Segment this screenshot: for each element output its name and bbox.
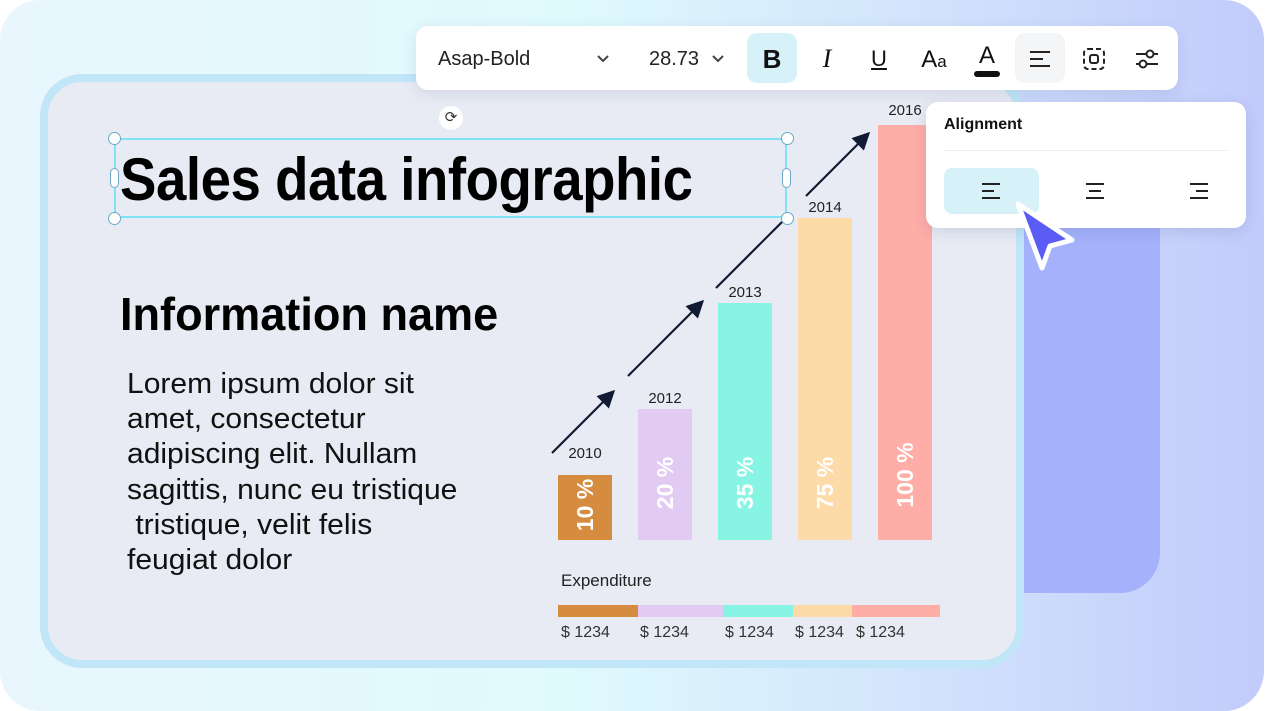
title selection box [114, 138, 787, 218]
align left option [944, 168, 1039, 214]
align button [1015, 33, 1065, 83]
underline: U [871, 46, 887, 71]
bar 2016 [878, 125, 932, 540]
align center option [1086, 183, 1104, 199]
bar chart: 2013 [728, 284, 762, 301]
bold button [747, 33, 797, 83]
body text: sagittis, nunc eu tristique [127, 474, 457, 506]
icon: settings sliders [1136, 50, 1158, 68]
expenditure bar [558, 605, 940, 617]
year labels: 2010 [568, 445, 602, 462]
toolbar [416, 26, 1178, 90]
bold button: B [763, 44, 781, 74]
bar chart: 2016 [888, 102, 922, 119]
case: Aa [921, 46, 947, 73]
selection handles [108, 132, 121, 145]
text color: A [979, 42, 995, 69]
align right option [1190, 183, 1208, 199]
bar chart: 2012 [648, 390, 682, 407]
italic: I [823, 44, 831, 73]
bar 2010: 10 % [572, 479, 598, 531]
body text: Lorem ipsum dolor sit [127, 368, 414, 400]
bar 2016: 100 % [892, 442, 918, 508]
expenditure label: Expenditure [561, 571, 652, 590]
text: $ 1234 [725, 624, 774, 641]
purple back shape [990, 200, 1160, 593]
icon: cursor [1016, 202, 1074, 270]
bar 2013: 35 % [732, 457, 758, 509]
body text [127, 368, 457, 576]
bar chart: 2014 [808, 199, 842, 216]
body text: adipiscing elit. Nullam [127, 438, 417, 470]
text color [974, 42, 1000, 77]
alignment popup [926, 102, 1246, 228]
bar 2013 [718, 303, 772, 540]
bar 2014 [798, 218, 852, 540]
body text: amet, consectetur [127, 403, 366, 435]
text: $ 1234 [640, 624, 689, 641]
heading: information name: Information name [120, 288, 498, 340]
expenditure values [561, 624, 905, 641]
main panel [40, 74, 1024, 668]
bar 2014: 75 % [812, 457, 838, 509]
bar 2010 [558, 475, 612, 540]
font name: Asap-Bold [438, 48, 530, 70]
bar chart [558, 102, 932, 540]
popup heading: Alignment [944, 116, 1022, 133]
text: $ 1234 [561, 624, 610, 641]
icon: frame [1083, 48, 1105, 70]
font size: 28.73 [649, 48, 699, 70]
title: Sales data infographic [120, 146, 693, 213]
body text: feugiat dolor [127, 544, 292, 576]
icon: rotate handle [439, 106, 463, 130]
body text: tristique, velit felis [135, 509, 372, 541]
bar 2012: 20 % [652, 457, 678, 509]
text: $ 1234 [795, 624, 844, 641]
bar 2012 [638, 409, 692, 540]
text: $ 1234 [856, 624, 905, 641]
icon: rotate handle: ⟳ [445, 109, 457, 126]
